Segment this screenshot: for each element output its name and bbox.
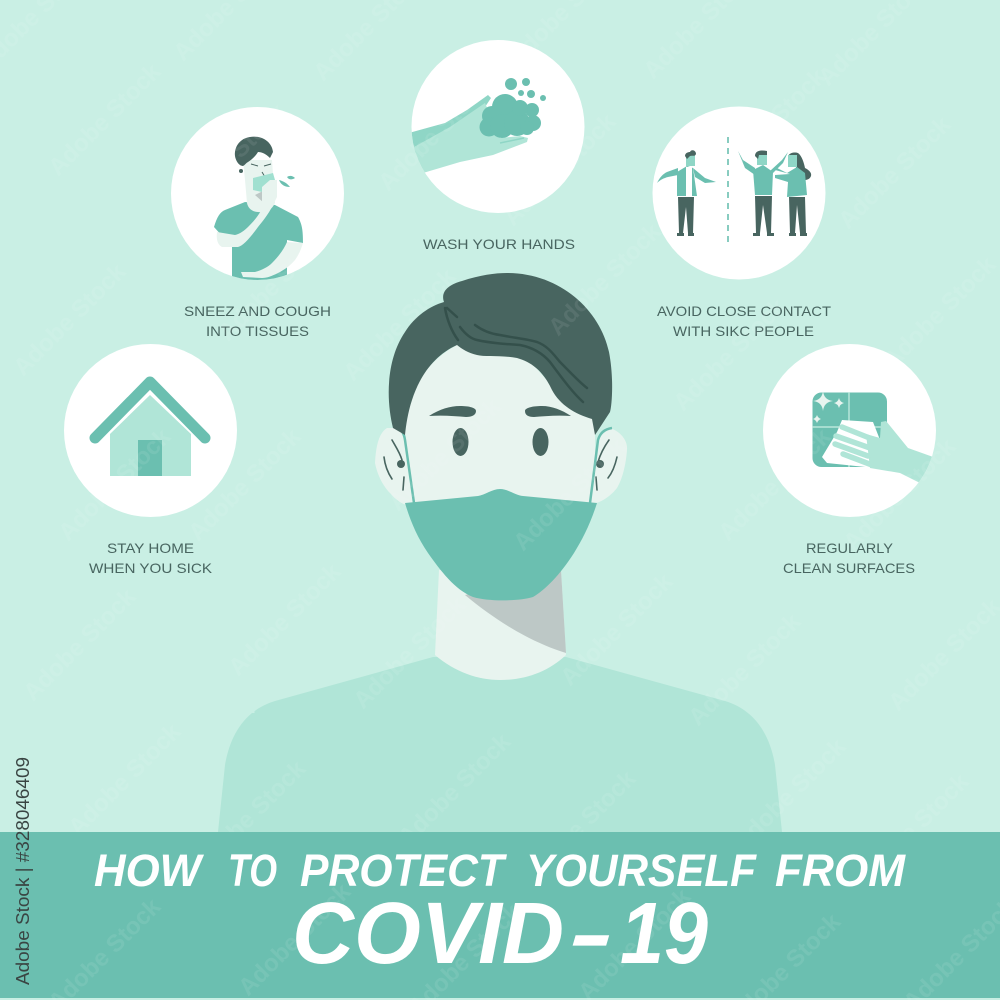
stock watermark pattern: Adobe Stock <box>838 433 962 556</box>
stock watermark pattern: Adobe Stock <box>851 768 975 891</box>
title band <box>0 832 1000 998</box>
label: stay home: WHEN YOU SICK <box>89 560 213 576</box>
band watermark pattern: Adobe Stock <box>233 878 357 1000</box>
ear <box>239 169 243 173</box>
main figure: man wearing a mask <box>218 273 782 832</box>
stock watermark pattern: Adobe Stock <box>708 63 832 186</box>
title line one <box>94 845 906 896</box>
icon circle: clean surfaces <box>763 344 936 517</box>
stock watermark pattern: Adobe Stock <box>348 591 472 714</box>
sparkles <box>813 391 844 423</box>
face <box>405 345 595 505</box>
tissue <box>253 173 275 192</box>
shirt <box>218 657 782 832</box>
back of hand <box>412 95 491 153</box>
stock watermark pattern: Adobe Stock <box>53 423 177 546</box>
title line two <box>292 885 708 982</box>
closed eyes and nose <box>251 164 271 177</box>
label: clean surfaces: REGULARLY <box>806 540 894 556</box>
face and neck <box>243 160 275 212</box>
fingers <box>835 427 872 465</box>
front of hand <box>405 103 528 173</box>
stock watermark pattern: Adobe Stock <box>223 558 347 681</box>
person alone <box>657 150 716 236</box>
stock watermark pattern: Adobe Stock <box>183 423 307 546</box>
stock watermark pattern: Adobe Stock <box>373 73 497 196</box>
house door <box>138 440 162 476</box>
person with arms raised <box>738 151 788 236</box>
shirt <box>214 202 303 280</box>
stock watermark pattern: Adobe Stock <box>728 733 852 856</box>
neck <box>435 570 566 680</box>
band watermark pattern <box>43 878 1000 1000</box>
stock watermark pattern: Adobe Stock <box>188 755 312 878</box>
cough droplets <box>279 176 295 187</box>
person with long hair <box>775 152 811 236</box>
stock watermark pattern: Adobe Stock <box>498 108 622 231</box>
label: avoid close contact <box>657 303 831 339</box>
stock watermark pattern: Adobe Stock <box>878 251 1000 374</box>
stock watermark pattern: Adobe Stock <box>63 718 187 841</box>
icon circle: stay home <box>64 344 237 517</box>
icon circle: wash your hands <box>405 40 584 213</box>
face mask <box>405 489 597 600</box>
stock watermark pattern: Adobe Stock <box>543 218 667 341</box>
second arm <box>241 242 303 278</box>
stock watermark pattern: Adobe Stock <box>168 98 292 221</box>
neck shadow <box>465 570 566 653</box>
hand body <box>866 421 936 484</box>
palm crease <box>500 138 524 143</box>
soap bubbles <box>505 78 546 101</box>
label: sneeze and cough: SNEEZ AND COUGH <box>184 303 331 319</box>
stock watermark pattern: Adobe Stock <box>393 728 517 851</box>
stock watermark pattern: Adobe Stock <box>508 433 632 556</box>
stock watermark pattern: Adobe Stock <box>18 583 142 706</box>
soap foam <box>480 94 541 138</box>
stock watermark pattern: Adobe Stock <box>518 765 642 888</box>
hair <box>389 273 612 435</box>
label: stay home <box>89 540 213 576</box>
stock watermark pattern: Adobe Stock <box>383 393 507 516</box>
icon circle: sneeze and cough <box>171 107 344 280</box>
label: sneeze and cough <box>184 303 331 339</box>
title line two: COVID <box>292 885 564 982</box>
left ear <box>375 428 414 505</box>
left eye <box>452 428 468 456</box>
stock watermark pattern: Adobe Stock <box>8 258 132 381</box>
right eye <box>532 428 548 456</box>
right eyebrow <box>525 406 571 417</box>
dashed divider <box>727 137 729 242</box>
label: clean surfaces: CLEAN SURFACES <box>783 560 915 576</box>
left eyebrow <box>429 406 476 417</box>
stock watermark pattern: Adobe Stock <box>683 608 807 731</box>
stock watermark pattern: Adobe Stock <box>213 223 337 346</box>
hand and arm <box>217 180 277 247</box>
stock watermark pattern: Adobe Stock <box>555 568 679 691</box>
stock watermark pattern: Adobe Stock <box>338 263 462 386</box>
label: avoid close contact: WITH SIKC PEOPLE <box>673 323 814 339</box>
side credit text: Adobe Stock | #328046409 <box>13 757 33 985</box>
title line two: - <box>569 885 613 982</box>
cloth <box>822 420 882 468</box>
hair <box>235 137 273 166</box>
tiled surface <box>812 392 887 467</box>
title line one: FROM <box>775 845 906 896</box>
label: clean surfaces <box>783 540 915 576</box>
title line one: PROTECT <box>300 845 507 896</box>
tile grid <box>812 392 887 467</box>
title line two: 19 <box>620 885 708 982</box>
label: avoid close contact: AVOID CLOSE CONTACT <box>657 303 831 319</box>
title line one: HOW <box>94 845 204 896</box>
label: wash your hands: WASH YOUR HANDS <box>423 236 575 252</box>
title line one: TO <box>228 845 277 896</box>
title line one: YOURSELF <box>526 845 757 896</box>
house roof <box>95 382 205 438</box>
right ear <box>588 428 627 504</box>
stock watermark pattern: Adobe Stock <box>43 58 167 181</box>
label: sneeze and cough: INTO TISSUES <box>206 323 309 339</box>
stock watermark pattern: Adobe Stock <box>713 423 837 546</box>
ear loops <box>397 428 612 503</box>
label: stay home: STAY HOME <box>107 540 194 556</box>
house body <box>110 395 191 476</box>
icon circle: avoid close contact <box>652 106 826 280</box>
stock watermark pattern: Adobe Stock <box>668 293 792 416</box>
stock watermark pattern: Adobe Stock <box>833 111 957 234</box>
tissue shadow <box>255 192 262 201</box>
